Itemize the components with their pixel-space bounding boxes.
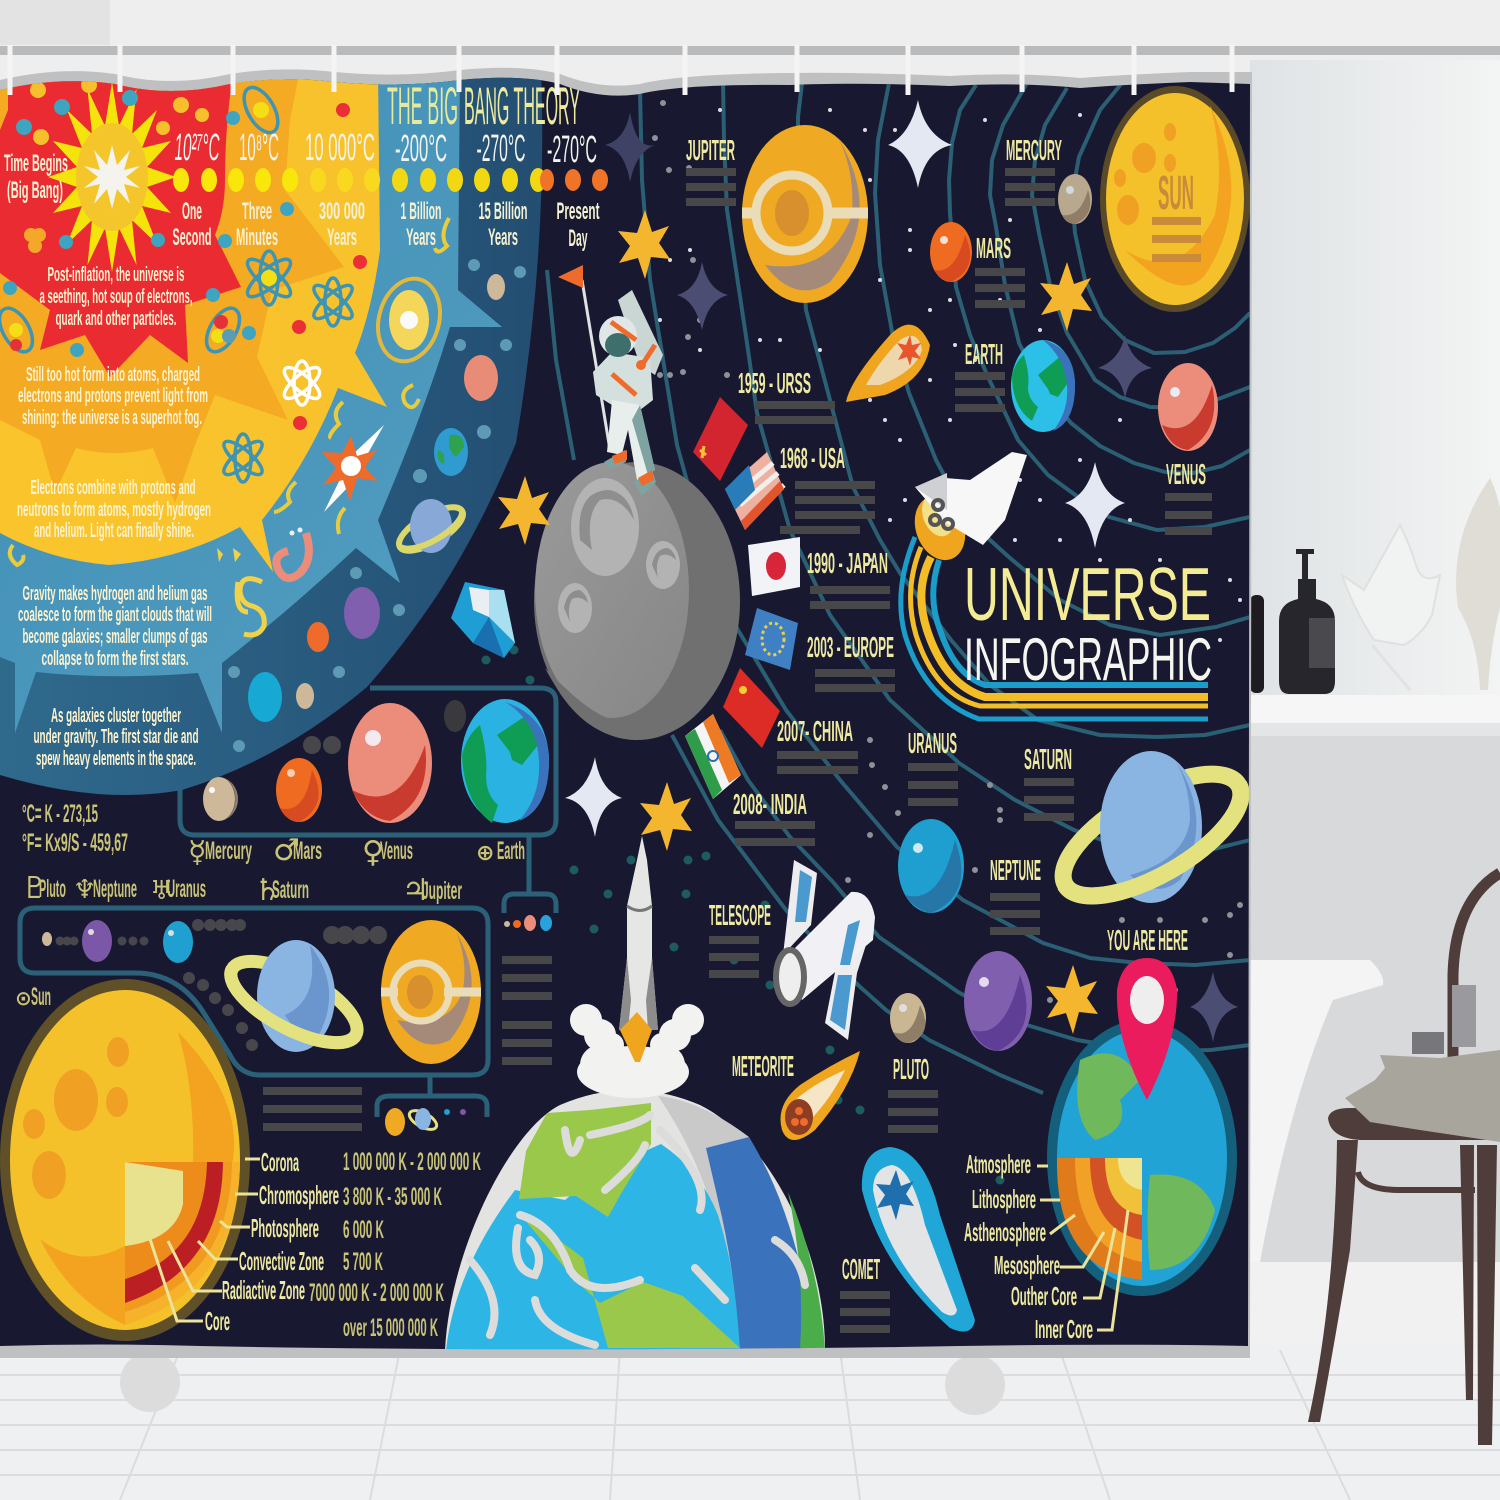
sun layer temperatures: 6 000 K [343, 1216, 384, 1244]
moon [534, 462, 740, 740]
timeline stages: Years [406, 224, 436, 251]
jupiter planet large [742, 125, 868, 303]
title: the big bang theory: THE BIG [387, 77, 458, 136]
tub feet [120, 1352, 1005, 1415]
planet: venus medium [1158, 363, 1218, 451]
big bang description text: Still too hot form into atoms, charged [26, 364, 200, 386]
label: jupiter [686, 135, 736, 202]
title: the big bang theory [387, 87, 580, 124]
meteorite [780, 1051, 860, 1140]
planet symbols row two: Neptune [93, 875, 137, 903]
planet symbols row two [28, 876, 462, 904]
timeline stages: 300 000 [319, 198, 365, 225]
earth layer labels: Lithosphere [972, 1184, 1036, 1214]
timeline stages: (Big Bang) [7, 177, 63, 204]
planet: jupiter [381, 920, 481, 1064]
planet: mars large [930, 222, 972, 282]
planet: earth medium [1011, 340, 1075, 432]
curtain panel: neutrons to form atoms, mostly hydrogen [17, 499, 211, 521]
curtain rod [0, 46, 1500, 55]
planet symbols row one: ♀ [362, 835, 384, 870]
flag: europe [745, 608, 798, 670]
hubble telescope [776, 860, 875, 1040]
timeline stages [4, 150, 600, 252]
curtain panel: become galaxies; smaller clumps of gas [22, 626, 208, 648]
sun planet large [1100, 86, 1250, 312]
planet symbols row two: ♆ [73, 875, 96, 905]
big bang description text: electrons and protons prevent light from [18, 385, 208, 407]
location pin [1117, 958, 1177, 1100]
timeline stages: Years [327, 224, 357, 251]
planet: earth [461, 699, 549, 823]
sun layer labels: Photosphere [251, 1213, 319, 1243]
big bang description text: As galaxies cluster together [51, 705, 181, 727]
timeline temperatures: 10⁸°C [239, 127, 279, 169]
planet: uranus blue [163, 921, 193, 963]
curtain panel [0, 50, 1259, 1360]
planet: neptune purple [82, 920, 112, 962]
flag: india [685, 714, 741, 799]
big bang description text: spew heavy elements in the space. [36, 748, 196, 770]
curtain panel: METEORITE [732, 1051, 794, 1083]
timeline stages: Time Begins [4, 150, 68, 177]
rainbow trail [901, 537, 1208, 719]
mission labels: 2008- INDIA [733, 789, 807, 821]
stars [498, 100, 1238, 1042]
planet symbols row one: ⊕ [476, 841, 494, 866]
earth with rocket launch [445, 1090, 825, 1350]
planet symbols row two: Saturn [272, 876, 309, 904]
label: saturn [1024, 744, 1074, 817]
planet: uranus medium [898, 819, 964, 913]
big bang description text: under gravity. The first star die and [34, 726, 198, 748]
space shuttle [906, 452, 1027, 567]
curtain panel: VENUS [1166, 459, 1206, 491]
curtain panel: SATURN [1024, 744, 1072, 776]
yellow galaxy [237, 579, 264, 635]
curtain panel: TELESCOPE [709, 900, 771, 932]
inner planets box [180, 688, 556, 913]
curtain panel: COMET [842, 1254, 880, 1286]
earth layer labels: Asthenosphere [964, 1217, 1046, 1247]
curtain panel: Earth [497, 837, 525, 865]
curtain panel: YOU ARE HERE [1107, 925, 1188, 957]
curtain panel: Convective Zone [239, 1246, 324, 1276]
ring: yellow [0, 70, 387, 572]
planet: saturn large [1045, 750, 1259, 920]
sun layer temperatures [309, 1148, 481, 1342]
curtain panel: coalesce to form the giant clouds that will [18, 604, 212, 626]
flag: usa [725, 452, 784, 530]
planet: pluto small [42, 932, 52, 946]
planet symbols row two: Uranus [167, 875, 206, 903]
planet: neptune medium [964, 951, 1032, 1051]
curtain panel: 1 000 000 K - 2 000 000 K [343, 1148, 481, 1176]
earth layer labels [964, 1149, 1093, 1344]
sun layer labels [205, 1147, 339, 1336]
chair with towels [1308, 873, 1500, 1445]
sun layer temperatures: over 15 000 000 K [343, 1314, 438, 1342]
planet symbols row one: Mars [293, 837, 322, 865]
big bang description text: Electrons combine with protons and [30, 477, 196, 499]
mission labels: 2007- CHINA [777, 716, 853, 748]
planet symbols row two: ♃ [402, 873, 429, 908]
timeline temperatures: -200°C [395, 128, 447, 170]
mini planets [385, 1107, 466, 1136]
label: pluto [888, 1054, 938, 1129]
planet: mercury large [1058, 174, 1092, 224]
mission text bars [735, 405, 895, 842]
curtain panel: 2003 - EUROPE [807, 632, 894, 664]
flag: japan [748, 537, 800, 596]
planet: saturn [224, 940, 364, 1052]
pink spiral [276, 528, 309, 578]
flags around moon [685, 397, 800, 799]
small yellow spirals [10, 218, 449, 565]
label: mercury [1005, 135, 1062, 202]
main title: INFOGRAPHIC [964, 626, 1212, 693]
star field [660, 110, 1240, 640]
spiral galaxy [376, 276, 442, 364]
curtain rings [10, 45, 1232, 95]
sun cross section: Sun [31, 983, 51, 1011]
timeline stages: Three [242, 198, 272, 225]
planet: mercury [203, 777, 238, 821]
mission labels [733, 368, 894, 821]
planet symbols row one [190, 838, 524, 866]
curtain panel: BANG THEORY [464, 77, 580, 136]
mini inner planets [504, 915, 552, 931]
curtain panel: URANUS [908, 728, 957, 760]
big bang description text: quark and other particles. [56, 308, 176, 330]
planet symbols row two: ♄ [254, 873, 281, 908]
timeline temperatures: 10²⁷°C [174, 127, 220, 169]
curtain panel: MERCURY [1006, 135, 1062, 167]
main title: UNIVERSE [964, 552, 1211, 636]
earth layer labels: Atmosphere [966, 1149, 1031, 1179]
label: uranus [908, 728, 958, 802]
ring: inner orange burst [0, 70, 344, 503]
timeline stages: Years [488, 224, 518, 251]
rocket with smoke [570, 836, 704, 1098]
grey star dots [655, 103, 1240, 1030]
flag: china [723, 668, 780, 748]
planet symbols row two: ♅ [150, 876, 173, 906]
bathtub [1250, 960, 1383, 1262]
earth layer labels: Mesosphere [994, 1250, 1060, 1280]
big bang description text: collapse to form the first stars. [42, 648, 188, 670]
curtain panel: EARTH [965, 339, 1003, 371]
sun layer labels: Radiactive Zone [222, 1275, 305, 1305]
sun layer temperatures: 5 700 K [343, 1248, 383, 1276]
orbit lines [547, 80, 1250, 1093]
mission labels: 1959 - URSS [738, 368, 811, 400]
label: neptune [990, 855, 1041, 931]
curtain panel: -270°C [547, 129, 597, 171]
planet symbols row one: ♂ [273, 833, 300, 868]
labelled earth cross section [1037, 1020, 1237, 1330]
comet small [846, 325, 930, 402]
label: mars [975, 233, 1025, 304]
timeline stages: 1 Billion [400, 198, 442, 225]
label: earth [955, 339, 1005, 408]
curtain panel: 1990 - JAPAN [807, 548, 888, 580]
curtain panel: Chromosphere [259, 1180, 339, 1210]
planet: pluto [890, 993, 926, 1043]
timeline temperatures [174, 134, 596, 162]
curtain panel: PLUTO [893, 1054, 929, 1086]
blue ring decorations [10, 218, 526, 752]
big bang description text: a seething, hot soup of electrons, [40, 286, 192, 308]
planet symbols row one: ☿ [188, 835, 206, 870]
timeline stages: One [182, 198, 202, 225]
astronaut [558, 265, 663, 496]
curtain panel: Jupiter [422, 877, 462, 905]
curtain hem [0, 68, 1252, 1358]
small ringed planet [396, 499, 466, 554]
large comet [862, 1147, 975, 1332]
timeline stages: 15 Billion [478, 198, 528, 225]
temperature formulas: °C= K - 273,15 [22, 800, 98, 828]
sun planet large: SUN [1158, 167, 1194, 220]
curtain panel: NEPTUNE [990, 855, 1041, 887]
curtain panel: Present [556, 198, 600, 225]
curtain panel: Inner Core [1035, 1314, 1093, 1344]
sun layer temperatures: 3 800 K - 35 000 K [343, 1183, 442, 1211]
big bang description text: shining: the universe is a superhot fog. [22, 407, 202, 429]
timeline temperatures: 10 000°C [305, 127, 375, 169]
sun layer temperatures: 7000 000 K - 2 000 000 K [309, 1279, 444, 1307]
big bang description text [17, 264, 212, 770]
central yellow sunburst [48, 82, 176, 272]
label: mars: MARS [976, 233, 1011, 265]
temperature formulas [22, 804, 128, 855]
curtain panel: JUPITER [686, 135, 735, 167]
bathroom shelf with bottles and plant decorations [1250, 478, 1500, 736]
gemstone [451, 582, 515, 658]
planet symbols row one: Mercury [205, 837, 252, 865]
planet symbols row two: ♇ [21, 871, 48, 906]
mission labels: 1968 - USA [780, 443, 845, 475]
main title [964, 552, 1212, 693]
planet symbols row one: Venus [380, 837, 413, 865]
ring: middle blue with spikes [0, 70, 502, 733]
red big bang burst [0, 80, 241, 377]
planet: venus [348, 703, 432, 823]
curtain panel: °F= Kx9/S - 459,67 [22, 829, 128, 857]
timeline stages: Minutes [236, 224, 278, 251]
small earth [434, 428, 468, 476]
sun cross section [0, 979, 260, 1341]
atoms [0, 82, 357, 482]
timeline dots [173, 168, 608, 192]
sun cross section: ⊙ [15, 986, 32, 1010]
outer planets box [20, 908, 552, 1136]
big bang description text: Post-inflation, the universe is [48, 264, 184, 286]
sun layer labels: Corona [261, 1147, 299, 1177]
sun layer labels: Core [205, 1306, 230, 1336]
flag: ussr [693, 397, 748, 481]
comet star [322, 425, 384, 512]
timeline stages: Second [172, 224, 212, 251]
label: venus [1165, 459, 1212, 531]
big bang description text: and helium. Light can finally shine. [34, 520, 194, 542]
curtain panel: Gravity makes hydrogen and helium gas [22, 583, 208, 605]
label: telescope [709, 900, 771, 974]
teal dust dots [486, 650, 1000, 1180]
ring: outer dark blue [0, 70, 542, 795]
label: comet [840, 1254, 890, 1329]
planet: mars [276, 758, 322, 822]
timeline temperatures: -270°C [476, 128, 526, 170]
planet symbols row two: Pluto [39, 875, 66, 903]
timeline stages: Day [568, 225, 588, 252]
big bang rings [0, 70, 542, 795]
particle dots [3, 77, 367, 430]
earth layer labels: Outher Core [1011, 1281, 1077, 1311]
